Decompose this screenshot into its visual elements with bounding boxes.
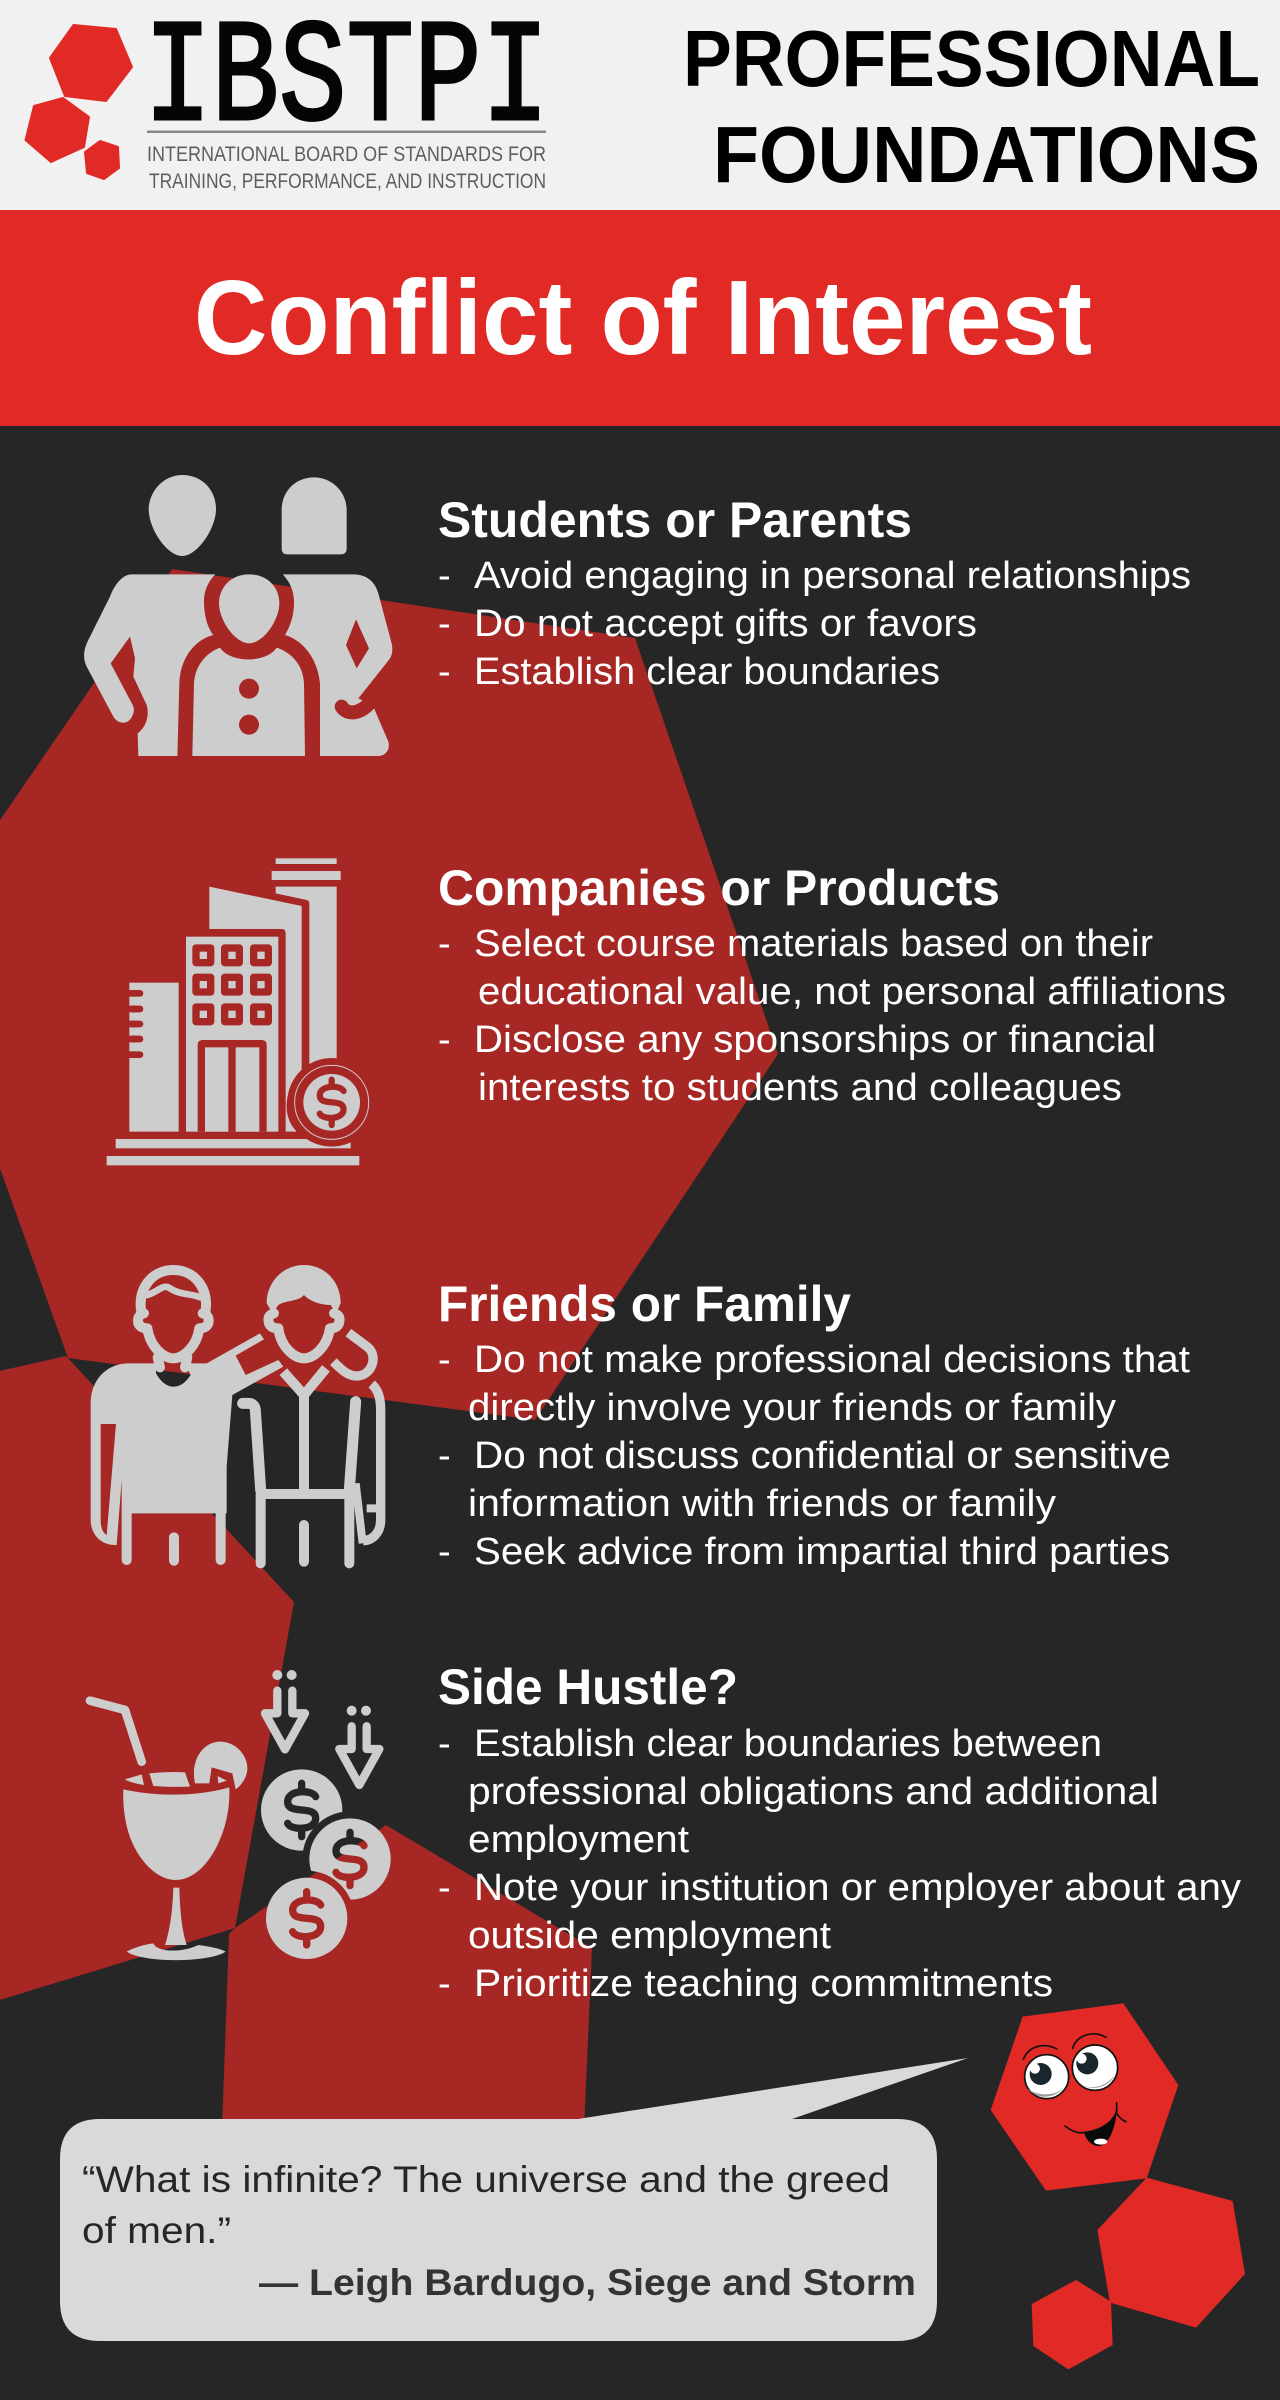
hexagons <box>991 2003 1245 2369</box>
logo hexagons <box>26 25 132 179</box>
logo tagline: INTERNATIONAL BOARD OF STANDARDS FOR <box>147 143 546 166</box>
list: - <box>438 651 451 693</box>
bubble shape <box>60 2058 968 2341</box>
list <box>438 1339 1190 1573</box>
logo tagline <box>147 143 546 193</box>
list: Seek advice from impartial third parties <box>474 1531 1170 1573</box>
list <box>438 555 1191 693</box>
list: Select course materials based on their <box>474 923 1153 965</box>
list: Disclose any sponsorships or financial <box>474 1019 1156 1061</box>
list: Establish clear boundaries <box>474 651 940 693</box>
background hexagons <box>0 569 778 2130</box>
attribution: — Leigh Bardugo, Siege and Storm <box>259 2262 916 2303</box>
speech bubble quote <box>60 2058 968 2341</box>
quote text: of men.” <box>82 2210 231 2251</box>
title band <box>0 210 1280 426</box>
logo wordmark: IBSTPI <box>144 0 549 163</box>
main title: Conflict of Interest <box>194 259 1092 377</box>
heading: Students or Parents <box>438 492 912 548</box>
section: side hustle <box>438 1659 1241 2005</box>
list: information with friends or family <box>468 1483 1056 1525</box>
list: Prioritize teaching commitments <box>474 1963 1053 2005</box>
list: - <box>438 555 451 597</box>
list: Do not accept gifts or favors <box>474 603 977 645</box>
list: Do not discuss confidential or sensitive <box>474 1435 1171 1477</box>
section: companies or products <box>438 860 1226 1109</box>
icon: cocktail, arrows and coins <box>90 1670 391 1960</box>
list: Note your institution or employer about any <box>474 1867 1241 1909</box>
list: Avoid engaging in personal relationships <box>474 555 1191 597</box>
list: - <box>438 603 451 645</box>
list: - <box>438 1963 451 2005</box>
list: - <box>438 923 451 965</box>
icon: office buildings with coin <box>107 858 376 1165</box>
section: students or parents <box>438 492 1191 693</box>
list: Establish clear boundaries between <box>474 1723 1102 1765</box>
heading: Friends or Family <box>438 1276 851 1332</box>
list: - <box>438 1339 451 1381</box>
list: outside employment <box>468 1915 831 1957</box>
heading: Side Hustle? <box>438 1659 738 1715</box>
header title: Professional Foundations: FOUNDATIONS <box>713 110 1260 199</box>
logo: IBSTPI <box>26 0 549 193</box>
cocktail <box>90 1701 247 1960</box>
mascot: hexagon character <box>991 2003 1245 2369</box>
left person <box>127 1270 221 1561</box>
list: Do not make professional decisions that <box>474 1339 1190 1381</box>
quote text <box>82 2159 890 2251</box>
list: - <box>438 1019 451 1061</box>
list: interests to students and colleagues <box>478 1067 1122 1109</box>
logo tagline: TRAINING, PERFORMANCE, AND INSTRUCTION <box>149 170 546 193</box>
header band <box>0 0 1280 210</box>
arrows <box>265 1670 379 1785</box>
coins <box>261 1769 391 1959</box>
list: - <box>438 1867 451 1909</box>
right person <box>243 1313 381 1563</box>
list: - <box>438 1531 451 1573</box>
list: professional obligations and additional <box>468 1771 1159 1813</box>
list: employment <box>468 1819 689 1861</box>
list: educational value, not personal affiliations <box>478 971 1226 1013</box>
list <box>438 1723 1241 2005</box>
heading: Companies or Products <box>438 860 1000 916</box>
list: directly involve your friends or family <box>468 1387 1116 1429</box>
icon: two friends <box>91 1265 381 1563</box>
list <box>438 923 1226 1109</box>
section: friends or family <box>438 1276 1190 1573</box>
list: - <box>438 1723 451 1765</box>
quote text: “What is infinite? The universe and the greed <box>82 2159 890 2200</box>
header title: Professional Foundations <box>683 14 1260 199</box>
icon: parents and child <box>84 475 392 756</box>
face <box>1023 2034 1126 2146</box>
list: - <box>438 1435 451 1477</box>
